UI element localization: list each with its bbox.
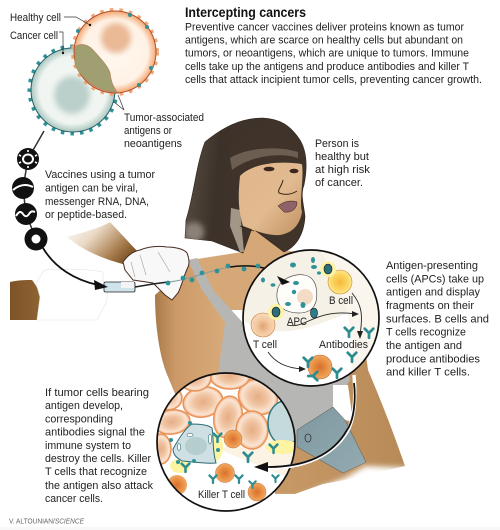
APC note: and killer T cells.: [386, 367, 470, 379]
tumor note: antigen develop,: [45, 400, 123, 412]
assistant arm: [67, 222, 138, 265]
bound antigen on APC: [310, 308, 318, 318]
vaccines note: [45, 169, 155, 221]
right arm skin: [270, 260, 405, 494]
tumor note: cancer cells.: [45, 493, 103, 505]
callout labels: cells: Cancer cell: [10, 30, 58, 42]
APC note: [386, 260, 489, 379]
lower circle antibodies: [182, 434, 279, 488]
credit strip: [0, 527, 500, 530]
tumor note: If tumor cells bearing: [45, 387, 149, 399]
connector from cancer cell to vaccine icons: [23, 131, 44, 239]
lower circle: tumor destruction: [156, 372, 296, 512]
syringe: [104, 282, 168, 292]
white gap beside top: [333, 385, 353, 422]
glove: lower hand: [36, 269, 108, 320]
tumor note: the antigen also attack: [45, 480, 154, 492]
credit: V. ALTOUNIAN/SCIENCE: [9, 518, 84, 526]
intro text: [185, 22, 482, 86]
sleeve: [10, 280, 40, 320]
APC note: cells (APCs) take up: [386, 273, 484, 285]
overlap of cells: [75, 45, 117, 92]
antigen strand into upper circle: [166, 264, 290, 285]
bangs highlight: [230, 148, 298, 170]
icon: DNA vaccine: [15, 203, 37, 225]
vaccines note: or peptide-based.: [45, 209, 127, 221]
tumor cell: [169, 421, 223, 473]
callout labels: cells: Tumor-associated: [124, 112, 204, 124]
APC note: antigen and display: [386, 287, 481, 299]
vaccines note: Vaccines using a tumor: [45, 169, 155, 181]
tumor note: corresponding: [45, 413, 113, 425]
arrow: vaccine to syringe: [43, 248, 108, 290]
APC note: fragments on their: [386, 300, 474, 312]
left arm skin: [155, 262, 238, 400]
tumor note: destroy the cells. Killer: [45, 453, 151, 465]
person note: Person is: [315, 138, 359, 150]
cancer cell: [30, 47, 116, 133]
APC: [277, 275, 317, 313]
antibodies: [345, 328, 373, 362]
intro text: antigens, which are scarce on healthy cells but abundant on: [185, 34, 463, 46]
APC note: T cells recognize: [386, 327, 466, 339]
tank top: [188, 258, 350, 447]
face: [239, 163, 302, 235]
callout labels: cells: antigens or: [124, 125, 172, 137]
callout labels: cells: [10, 12, 204, 150]
hair strand: [230, 208, 244, 252]
right tumor cell: [266, 401, 294, 454]
intro text: Preventive cancer vaccines deliver proteins known as tumor: [185, 22, 464, 34]
vaccines note: antigen can be viral,: [45, 182, 138, 194]
skin fade: [270, 466, 415, 530]
title: Intercepting cancers: [185, 5, 306, 20]
person note: at high risk: [315, 164, 371, 176]
APC note: produce antibodies: [386, 353, 480, 365]
tumor note: antibodies signal the: [45, 427, 145, 439]
person illustration: [155, 118, 405, 494]
hair: [185, 118, 306, 253]
APC note: surfaces. B cells and: [386, 313, 489, 325]
vaccines note: messenger RNA, DNA,: [45, 196, 149, 208]
T cell: [251, 304, 284, 337]
intro text: cells take up the antigens and produce antibodies and killer T: [185, 61, 470, 73]
bangs: [230, 125, 305, 178]
person note: healthy but: [315, 151, 369, 163]
healthy cell: [74, 10, 156, 94]
jaw line: [240, 226, 254, 231]
teal antigens on healthy cell: [76, 13, 153, 87]
tumor note: immune system to: [45, 440, 131, 452]
B cell: [320, 261, 352, 294]
killer T cell: [304, 355, 341, 380]
neck and chest: [188, 222, 360, 310]
lips: [278, 201, 297, 212]
waistband: [297, 407, 366, 473]
upper circle: immune response: Antibodies: [319, 339, 368, 351]
person note: of cancer.: [315, 177, 363, 189]
icon: viral vaccine: [17, 148, 39, 170]
arrows inside circle: [268, 293, 361, 369]
icon: peptide vaccine: [24, 228, 48, 250]
arrow: upper circle to lower circle: [254, 375, 355, 472]
healthy tissue cells: [158, 374, 278, 465]
intro text: tumors, or neoantigens, which are unique to tumors. Immune: [185, 48, 469, 60]
glove: upper hand: [123, 246, 189, 300]
upper circle: immune response: APC: [287, 316, 307, 328]
person note: [315, 138, 371, 189]
upper circle: immune response: [243, 250, 385, 390]
intro text: cells that attack incipient tumor cells, preventing cancer growth.: [185, 74, 482, 86]
free antigens: [261, 257, 321, 287]
Killer T cell label: Killer T cell: [198, 489, 245, 501]
APC note: the antigen and: [386, 340, 462, 352]
nose: [279, 180, 297, 194]
waistband loop detail: [305, 434, 311, 442]
callout labels: cells: Healthy cell: [10, 12, 61, 24]
upper circle labels: B cell: [329, 295, 353, 307]
tumor note: [45, 387, 154, 505]
upper circle: immune response: T cell: [253, 339, 277, 351]
icon: mRNA vaccine: [12, 177, 34, 199]
tumor note: T cells that recognize: [45, 466, 147, 478]
killer T cells: [167, 430, 266, 501]
callout labels: cells: neoantigens: [124, 138, 182, 150]
APC note: Antigen-presenting: [386, 260, 478, 272]
hair brush highlight: [184, 222, 204, 242]
eyes: [264, 167, 274, 171]
